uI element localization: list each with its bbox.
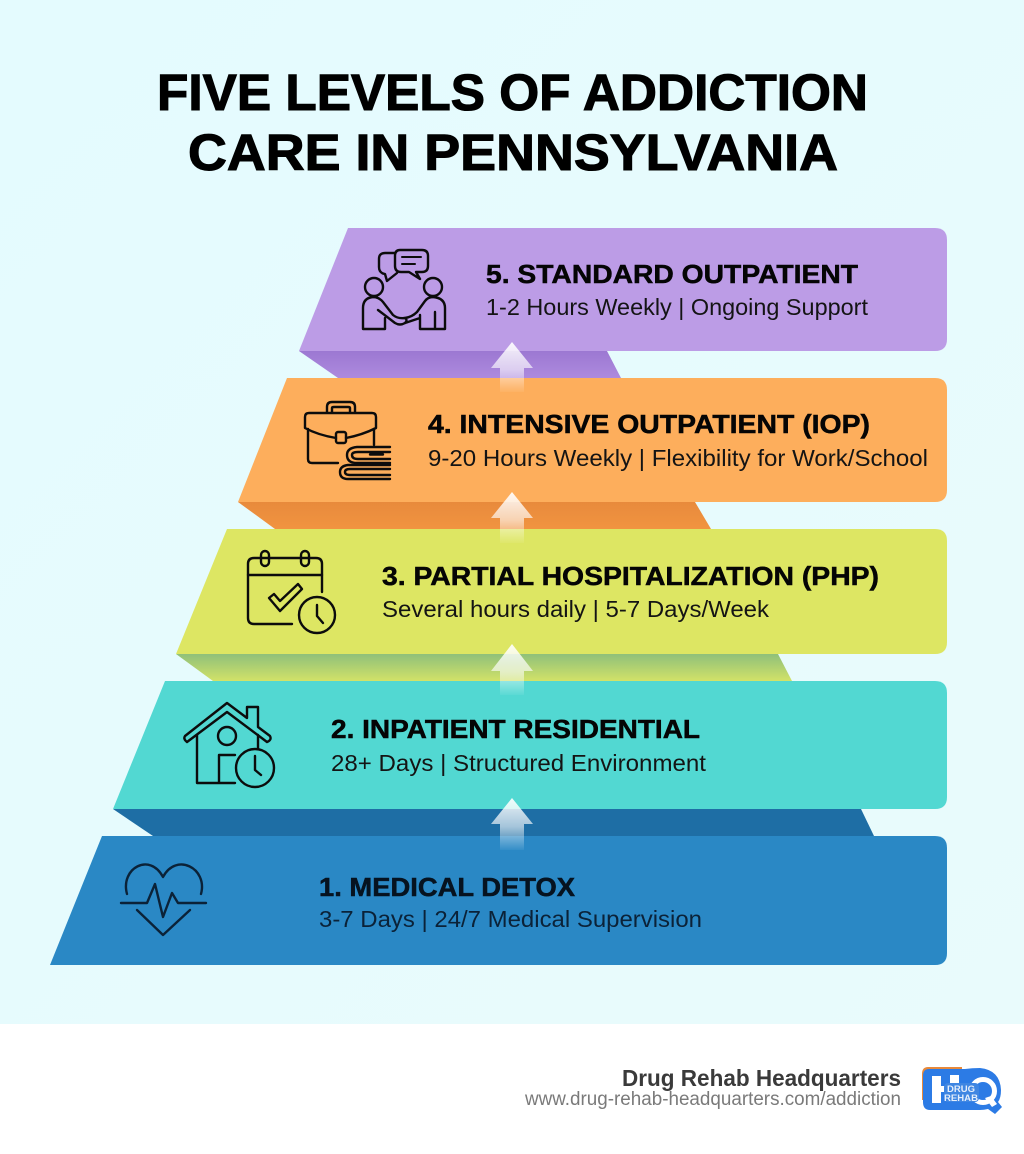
logo: HQ badge — [922, 1067, 1002, 1114]
title: FIVE LEVELS OF ADDICTION — [157, 64, 868, 121]
footer brand text: Drug Rehab Headquarters — [622, 1065, 901, 1091]
heading and detail — [331, 714, 707, 776]
slab face: orange — [238, 378, 947, 502]
level 2: inpatient residential — [113, 681, 947, 836]
title — [157, 64, 868, 181]
logo: HQ badge: DRUG — [947, 1084, 975, 1094]
arrow: level 1 to level 2 — [491, 798, 533, 850]
icon: calendar with check and clock — [248, 551, 335, 633]
footer brand text — [524, 1065, 901, 1110]
level 1: medical detox — [50, 836, 947, 965]
icon: briefcase and books — [305, 402, 390, 479]
heading and detail: 3. PARTIAL HOSPITALIZATION (PHP) — [382, 561, 879, 591]
title: CARE IN PENNSYLVANIA — [188, 124, 838, 181]
slab face: teal — [113, 681, 947, 809]
pyramid of care levels — [50, 228, 947, 965]
level 3: partial hospitalization — [176, 529, 947, 681]
slab side: green — [176, 654, 792, 681]
heading and detail: 2. INPATIENT RESIDENTIAL — [331, 714, 700, 744]
heading and detail — [319, 872, 702, 932]
heading and detail: 4. INTENSIVE OUTPATIENT (IOP) — [428, 409, 870, 439]
heading and detail: 5. STANDARD OUTPATIENT — [486, 259, 858, 289]
heading and detail: 1. MEDICAL DETOX — [319, 872, 576, 902]
heading and detail: 1-2 Hours Weekly | Ongoing Support — [486, 294, 869, 320]
heading and detail: 9-20 Hours Weekly | Flexibility for Work/School — [428, 445, 928, 471]
level 4: intensive outpatient — [238, 378, 947, 529]
icon: house with clock — [184, 703, 274, 787]
logo: HQ badge: REHAB — [944, 1093, 979, 1103]
slab side: purple — [299, 351, 621, 378]
icon: people shaking hands with speech bubbles — [363, 250, 445, 329]
slab face: purple — [299, 228, 947, 351]
slab side: dark blue — [113, 809, 874, 836]
arrow: level 2 to level 3 — [491, 644, 533, 695]
heading and detail — [382, 561, 879, 622]
arrow: level 3 to level 4 — [491, 492, 533, 543]
arrow: level 4 to level 5 — [491, 342, 533, 392]
level 5: standard outpatient — [299, 228, 947, 378]
slab face: blue — [50, 836, 947, 965]
heading and detail: 3-7 Days | 24/7 Medical Supervision — [319, 906, 702, 932]
slab face: lime — [176, 529, 947, 654]
heading and detail — [428, 409, 928, 471]
icon: heart with pulse line — [121, 864, 206, 935]
heading and detail: 28+ Days | Structured Environment — [331, 750, 707, 776]
slab side: orange — [238, 502, 711, 529]
heading and detail — [486, 259, 869, 320]
footer band — [0, 1024, 1024, 1154]
heading and detail: Several hours daily | 5-7 Days/Week — [382, 596, 770, 622]
footer brand text: www.drug-rehab-headquarters.com/addiction — [524, 1089, 901, 1110]
